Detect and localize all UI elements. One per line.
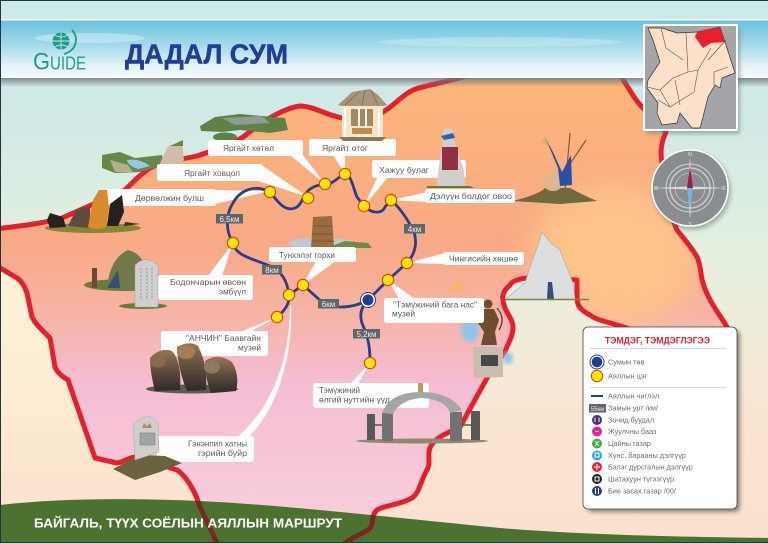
- label: Dorvoljin bulsh: [107, 189, 216, 206]
- compass: E: [722, 186, 726, 192]
- legend panel: Хүнс, барааны дэлгүүр: [608, 451, 686, 460]
- distance label 5,2 km: [353, 329, 380, 339]
- label tails: [208, 155, 445, 446]
- legend panel: 55км: [591, 407, 604, 413]
- compass: N: [688, 152, 692, 158]
- route line: [227, 174, 416, 363]
- label: Genepil home: гэрийн буйр: [198, 448, 247, 458]
- label: Yargait hotol: Яргайт хөтөл: [223, 143, 274, 153]
- legend panel: Жуулчны бааз: [608, 427, 657, 436]
- legend panel: [583, 327, 740, 512]
- label: Bodonchar tomb: Бодончарын өвсөн: [170, 277, 246, 287]
- illustration: Yurt and stele base: [84, 250, 167, 309]
- illustration: Dorvoljin bulsh rocks: [45, 190, 141, 233]
- locator minimap: [644, 25, 740, 134]
- label: Yargait otog: Яргайт отог: [322, 143, 368, 153]
- distance label 4 km: [404, 224, 425, 234]
- banner shadow: [0, 78, 768, 87]
- orange smudge: [449, 280, 468, 291]
- label: Khajuu bulag: Хажуу булаг: [379, 165, 429, 175]
- label: Temujin birthplace gate: Тэмүжиний: [319, 385, 360, 395]
- distance label 6 km: [318, 299, 339, 309]
- logo: GUIDE: UIDE: [50, 52, 86, 74]
- legend panel: Замын урт /км/: [608, 404, 659, 412]
- label: Yargait hovtsol: Яргайт ховцол: [184, 168, 240, 178]
- legend panel: Бие засах газар /00/: [608, 486, 677, 496]
- illustration: Temujin statue: [461, 300, 513, 378]
- illustration: bears: [146, 343, 238, 394]
- label: Genepil home: Гэнэнпил хатны: [188, 438, 247, 448]
- legend panel: Зочид буудал: [608, 416, 654, 424]
- legend panel: Шатахуун түгээгүүр: [608, 474, 674, 484]
- logo: GUIDE: G: [33, 48, 50, 76]
- label: Khajuu bulag: [372, 160, 466, 178]
- logo: GUIDE: [33, 30, 86, 76]
- label: Bodonchar tomb: [158, 275, 253, 300]
- label: Tunkhleg gorkhi: Тунхэлэг горхи: [279, 250, 335, 260]
- left cream area: [0, 255, 215, 543]
- distance label 8 km: [262, 265, 282, 275]
- distance label 8 km: 8км: [265, 266, 279, 275]
- header banner: [0, 19, 768, 78]
- green hill footer: [1, 499, 768, 542]
- label: Chinggis monument: Чингисийн хөшөө: [449, 254, 518, 264]
- compass: [652, 150, 731, 230]
- illustration: gazebo: [338, 89, 387, 141]
- illustration: Khajuu stone: [426, 127, 474, 188]
- legend panel: Сумын төв: [608, 358, 645, 366]
- soum centre marker: [360, 292, 376, 308]
- label: Temujin childhood museum: "Тэмүжиний бага нас": [393, 300, 477, 310]
- title: ДАДАЛ СУМ: [125, 38, 288, 70]
- compass: S: [688, 222, 692, 228]
- label: Dorvoljin bulsh: Дөрвөлжин булш: [135, 193, 204, 203]
- legend panel: Аяллын чиглэл: [608, 392, 659, 400]
- label: Yargait hotol: [208, 140, 303, 156]
- illustration: gate arch: [356, 383, 488, 444]
- illustration: Tunkhleg rock: [288, 216, 372, 248]
- route nodes: [227, 168, 413, 369]
- distance label 4 km: 4км: [408, 225, 421, 234]
- illustration: Yargait hotol landscape: [200, 114, 288, 142]
- legend panel: Бэлэг дурсгалын дэлгүүр: [608, 462, 693, 472]
- label: Yargait otog: [309, 139, 396, 156]
- distance label 6,5 km: 6,5км: [219, 215, 240, 224]
- label: Chinggis monument: [443, 252, 524, 265]
- illustration: Bodonchar stele: [135, 260, 158, 307]
- light orange glow on the east side: [530, 185, 700, 325]
- label: Anchin museum: "АНЧИН" Баавгайн: [186, 333, 261, 343]
- label: Yargait hovtsol: [157, 164, 263, 181]
- distance label 6,5 km: [216, 214, 243, 224]
- legend panel: Аяллын цэг: [608, 372, 648, 380]
- illustration: Chinggis monument: [505, 232, 589, 300]
- illustration: Genepil stele with rubble: [113, 417, 182, 480]
- label: Bodonchar tomb: эмбүүл: [219, 286, 246, 296]
- illustration: ovoo with blue flags: [513, 133, 597, 204]
- label: Genepil home: [157, 436, 254, 462]
- illustration: Yargait hovtsol canyon: [102, 140, 184, 173]
- compass: W: [654, 186, 659, 192]
- distance label 5,2 km: 5,2км: [356, 330, 377, 339]
- label: Temujin childhood museum: [384, 298, 484, 323]
- legend panel: ТЭМДЭГ, ТЭМДЭГЛЭГЭЭ: [605, 336, 710, 346]
- label: Deluun boldog ovoo: [425, 189, 515, 203]
- label: Temujin birthplace gate: [313, 383, 429, 408]
- label: Anchin museum: [161, 331, 268, 356]
- label: Deluun boldog ovoo: Дэлүүн болдог овоо: [430, 191, 512, 201]
- footer title: БАЙГАЛЬ, ТҮҮХ СОЁЛЫН АЯЛЛЫН МАРШРУТ: [34, 516, 342, 530]
- label: Anchin museum: музей: [238, 342, 261, 352]
- label: Temujin birthplace gate: өлгий нутгийн үүд: [319, 394, 390, 404]
- label: Temujin childhood museum: музей: [392, 308, 415, 318]
- distance label 6 km: 6км: [322, 300, 335, 309]
- label: Tunkhleg gorkhi: [269, 247, 356, 262]
- legend panel: Цайны газар: [608, 439, 651, 448]
